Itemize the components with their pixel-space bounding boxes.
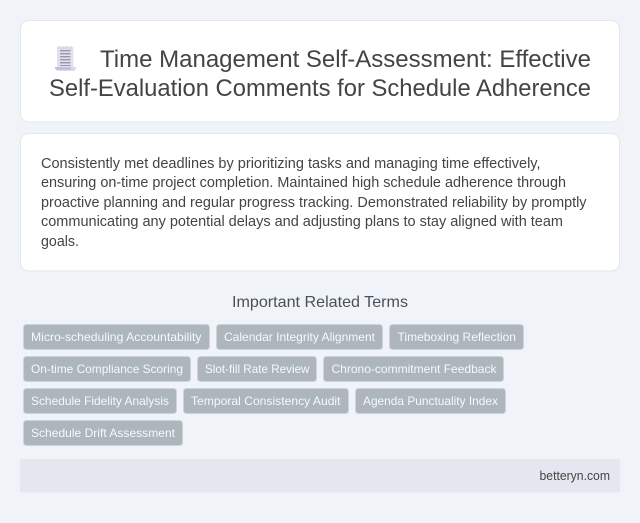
tag [184, 388, 348, 414]
tag [216, 324, 382, 350]
title: Self-Evaluation Comments for Schedule Adherence [49, 75, 591, 102]
tag [24, 388, 176, 414]
tag: On-time Compliance Scoring [31, 362, 183, 376]
tag [24, 324, 210, 350]
text block: comment body [41, 156, 587, 250]
text block: comment body: communicating any potential delays and adjusting plans to stay aligned with team [41, 214, 563, 230]
tag: Micro-scheduling Accountability [31, 330, 202, 344]
tag [324, 356, 504, 382]
title [49, 46, 591, 102]
tag: Schedule Drift Assessment [31, 426, 176, 440]
tag: Temporal Consistency Audit [191, 394, 341, 408]
tag [390, 324, 524, 350]
text block: comment body: Consistently met deadlines by prioritizing tasks and managing time effectively, [41, 156, 540, 172]
tag: Schedule Fidelity Analysis [31, 394, 169, 408]
tag: Timeboxing Reflection [398, 330, 516, 344]
tag [24, 356, 190, 382]
text block: comment body: proactive planning and regular progress tracking. Demonstrated reliability by promptly [41, 195, 587, 211]
text block: comment body: ensuring on-time project completion. Maintained high schedule adherence through [41, 175, 566, 191]
panel: related term tags [24, 324, 524, 446]
tag: Calendar Integrity Alignment [224, 330, 376, 344]
tag [356, 388, 506, 414]
panel: self-evaluation comment [20, 134, 620, 271]
text block: comment body: goals. [41, 234, 79, 250]
icon: document scroll [55, 46, 76, 71]
footer source text: betteryn.com [540, 469, 610, 483]
heading: important related terms: Important Related Terms [232, 294, 408, 311]
tag [198, 356, 316, 382]
tag: Agenda Punctuality Index [363, 394, 498, 408]
tag: Slot-fill Rate Review [205, 362, 310, 376]
footer bar [20, 459, 620, 492]
tag: Chrono-commitment Feedback [332, 362, 497, 376]
panel: title card [20, 20, 620, 122]
title: Time Management Self-Assessment: Effective [100, 46, 591, 73]
tag [24, 420, 182, 446]
